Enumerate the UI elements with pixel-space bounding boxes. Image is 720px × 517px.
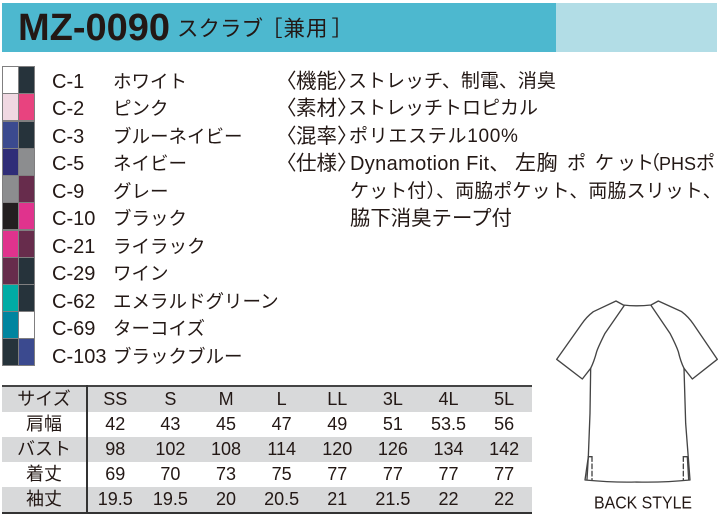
product specifications: 〈 [276, 70, 296, 93]
size table: 51 [383, 414, 403, 434]
product specifications: 〉 [337, 97, 358, 120]
product specifications: 仕様 [296, 152, 337, 175]
colour list: C-2 [52, 98, 84, 120]
colour list: C-10 [52, 208, 95, 230]
size table: 77 [494, 464, 514, 484]
colour list [52, 71, 279, 368]
caption: back style: BACK STYLE [594, 493, 692, 513]
size table: 20.5 [264, 489, 299, 509]
colour list: グレー [113, 181, 169, 202]
colour list: C-3 [52, 126, 84, 148]
product specifications: ポ [696, 153, 715, 174]
size table: 43 [160, 414, 180, 434]
size table: 47 [272, 414, 292, 434]
size table: 42 [105, 414, 125, 434]
size table: 着丈 [26, 464, 62, 484]
size table: 77 [327, 464, 347, 484]
header dark band [2, 3, 556, 52]
product specifications: ポリエステル100% [349, 126, 519, 147]
colour list: ブラック [113, 208, 187, 229]
colour list: ブラックブルー [113, 346, 243, 367]
colour list: ブルーネイビー [113, 126, 243, 147]
product specifications: （ [641, 153, 660, 174]
size table: 69 [105, 464, 125, 484]
size table: 21.5 [375, 489, 410, 509]
title: product name [177, 17, 354, 41]
size table: 19.5 [153, 489, 188, 509]
product specifications: 〉 [337, 70, 358, 93]
header banner [2, 3, 717, 52]
product specifications: 〉 [337, 152, 358, 175]
colour list: C-5 [52, 153, 84, 175]
size table: 45 [216, 414, 236, 434]
colour list: C-1 [52, 71, 84, 93]
size table: 22 [439, 489, 459, 509]
size table: 21 [327, 489, 347, 509]
size table: LL [327, 389, 347, 409]
colour list: C-29 [52, 263, 95, 285]
product specifications: ストレッチ、制電、消臭 [348, 71, 556, 92]
colour list: C-103 [52, 346, 106, 368]
size table: 70 [160, 464, 180, 484]
size table: 22 [494, 489, 514, 509]
colour swatches [2, 66, 35, 366]
size table: 120 [322, 439, 352, 459]
product specifications: Dynamotion Fit、 [350, 153, 510, 175]
size table: M [219, 389, 234, 409]
size table: 19.5 [98, 489, 133, 509]
size table: 102 [155, 439, 185, 459]
product specifications: ト [635, 153, 654, 174]
product specifications: ケ [595, 153, 614, 174]
size table: S [164, 389, 176, 409]
size table: 126 [378, 439, 408, 459]
product specifications: 〉 [337, 125, 358, 148]
size table: 134 [434, 439, 464, 459]
colour list: ワイン [113, 263, 169, 284]
colour list: ライラック [113, 236, 206, 257]
size table: バスト [17, 439, 71, 459]
size table: 4L [439, 389, 459, 409]
colour list: ターコイズ [113, 318, 205, 339]
product specifications: 〈 [276, 152, 296, 175]
colour list: ピンク [113, 98, 169, 119]
product specifications: 左胸 [515, 152, 558, 175]
size table: SS [103, 389, 127, 409]
product specifications: 機能 [296, 70, 337, 93]
product specifications: ストレッチトロピカル [348, 98, 538, 119]
product specifications [276, 70, 720, 230]
size table: 肩幅 [26, 414, 62, 434]
size table: サイズ [17, 389, 71, 409]
colour list: C-9 [52, 181, 84, 203]
size table: 20 [216, 489, 236, 509]
size table: 5L [494, 389, 514, 409]
size table: 98 [105, 439, 125, 459]
product specifications: 混率 [296, 125, 337, 148]
colour list: ホワイト [113, 71, 187, 92]
product specifications: 〈 [276, 125, 296, 148]
size table: 108 [211, 439, 241, 459]
colour list: C-21 [52, 236, 95, 258]
size table: 53.5 [431, 414, 466, 434]
title: product name: スクラブ [177, 17, 263, 41]
illustration: back view of scrub top [556, 300, 718, 513]
colour list: C-62 [52, 291, 95, 313]
product specifications: ポ [567, 153, 586, 174]
product specifications: 脇下消臭テープ付 [350, 208, 512, 230]
size table: 49 [327, 414, 347, 434]
title: product name: ［兼用］ [261, 17, 354, 41]
product specifications: PHS [659, 154, 696, 174]
size table: 袖丈 [26, 489, 62, 509]
size table: 56 [494, 414, 514, 434]
colour list: ネイビー [113, 153, 187, 174]
colour list: C-69 [52, 318, 95, 340]
product specifications: 素材 [296, 97, 337, 120]
size table: 142 [489, 439, 519, 459]
product specifications: 〈 [276, 97, 296, 120]
size table: 73 [216, 464, 236, 484]
title: model number: MZ-0090 [18, 7, 170, 49]
size table: 77 [439, 464, 459, 484]
size table: 75 [272, 464, 292, 484]
colour list: エメラルドグリーン [113, 291, 279, 312]
size table: L [277, 389, 287, 409]
size table: 3L [383, 389, 403, 409]
size table [2, 385, 532, 514]
size table: 77 [383, 464, 403, 484]
garment outline [557, 301, 717, 482]
product specifications: ケット付）、両脇ポケット、両脇スリット、 [350, 181, 720, 202]
product specifications: ッ [617, 153, 636, 174]
size table: 114 [267, 439, 296, 459]
